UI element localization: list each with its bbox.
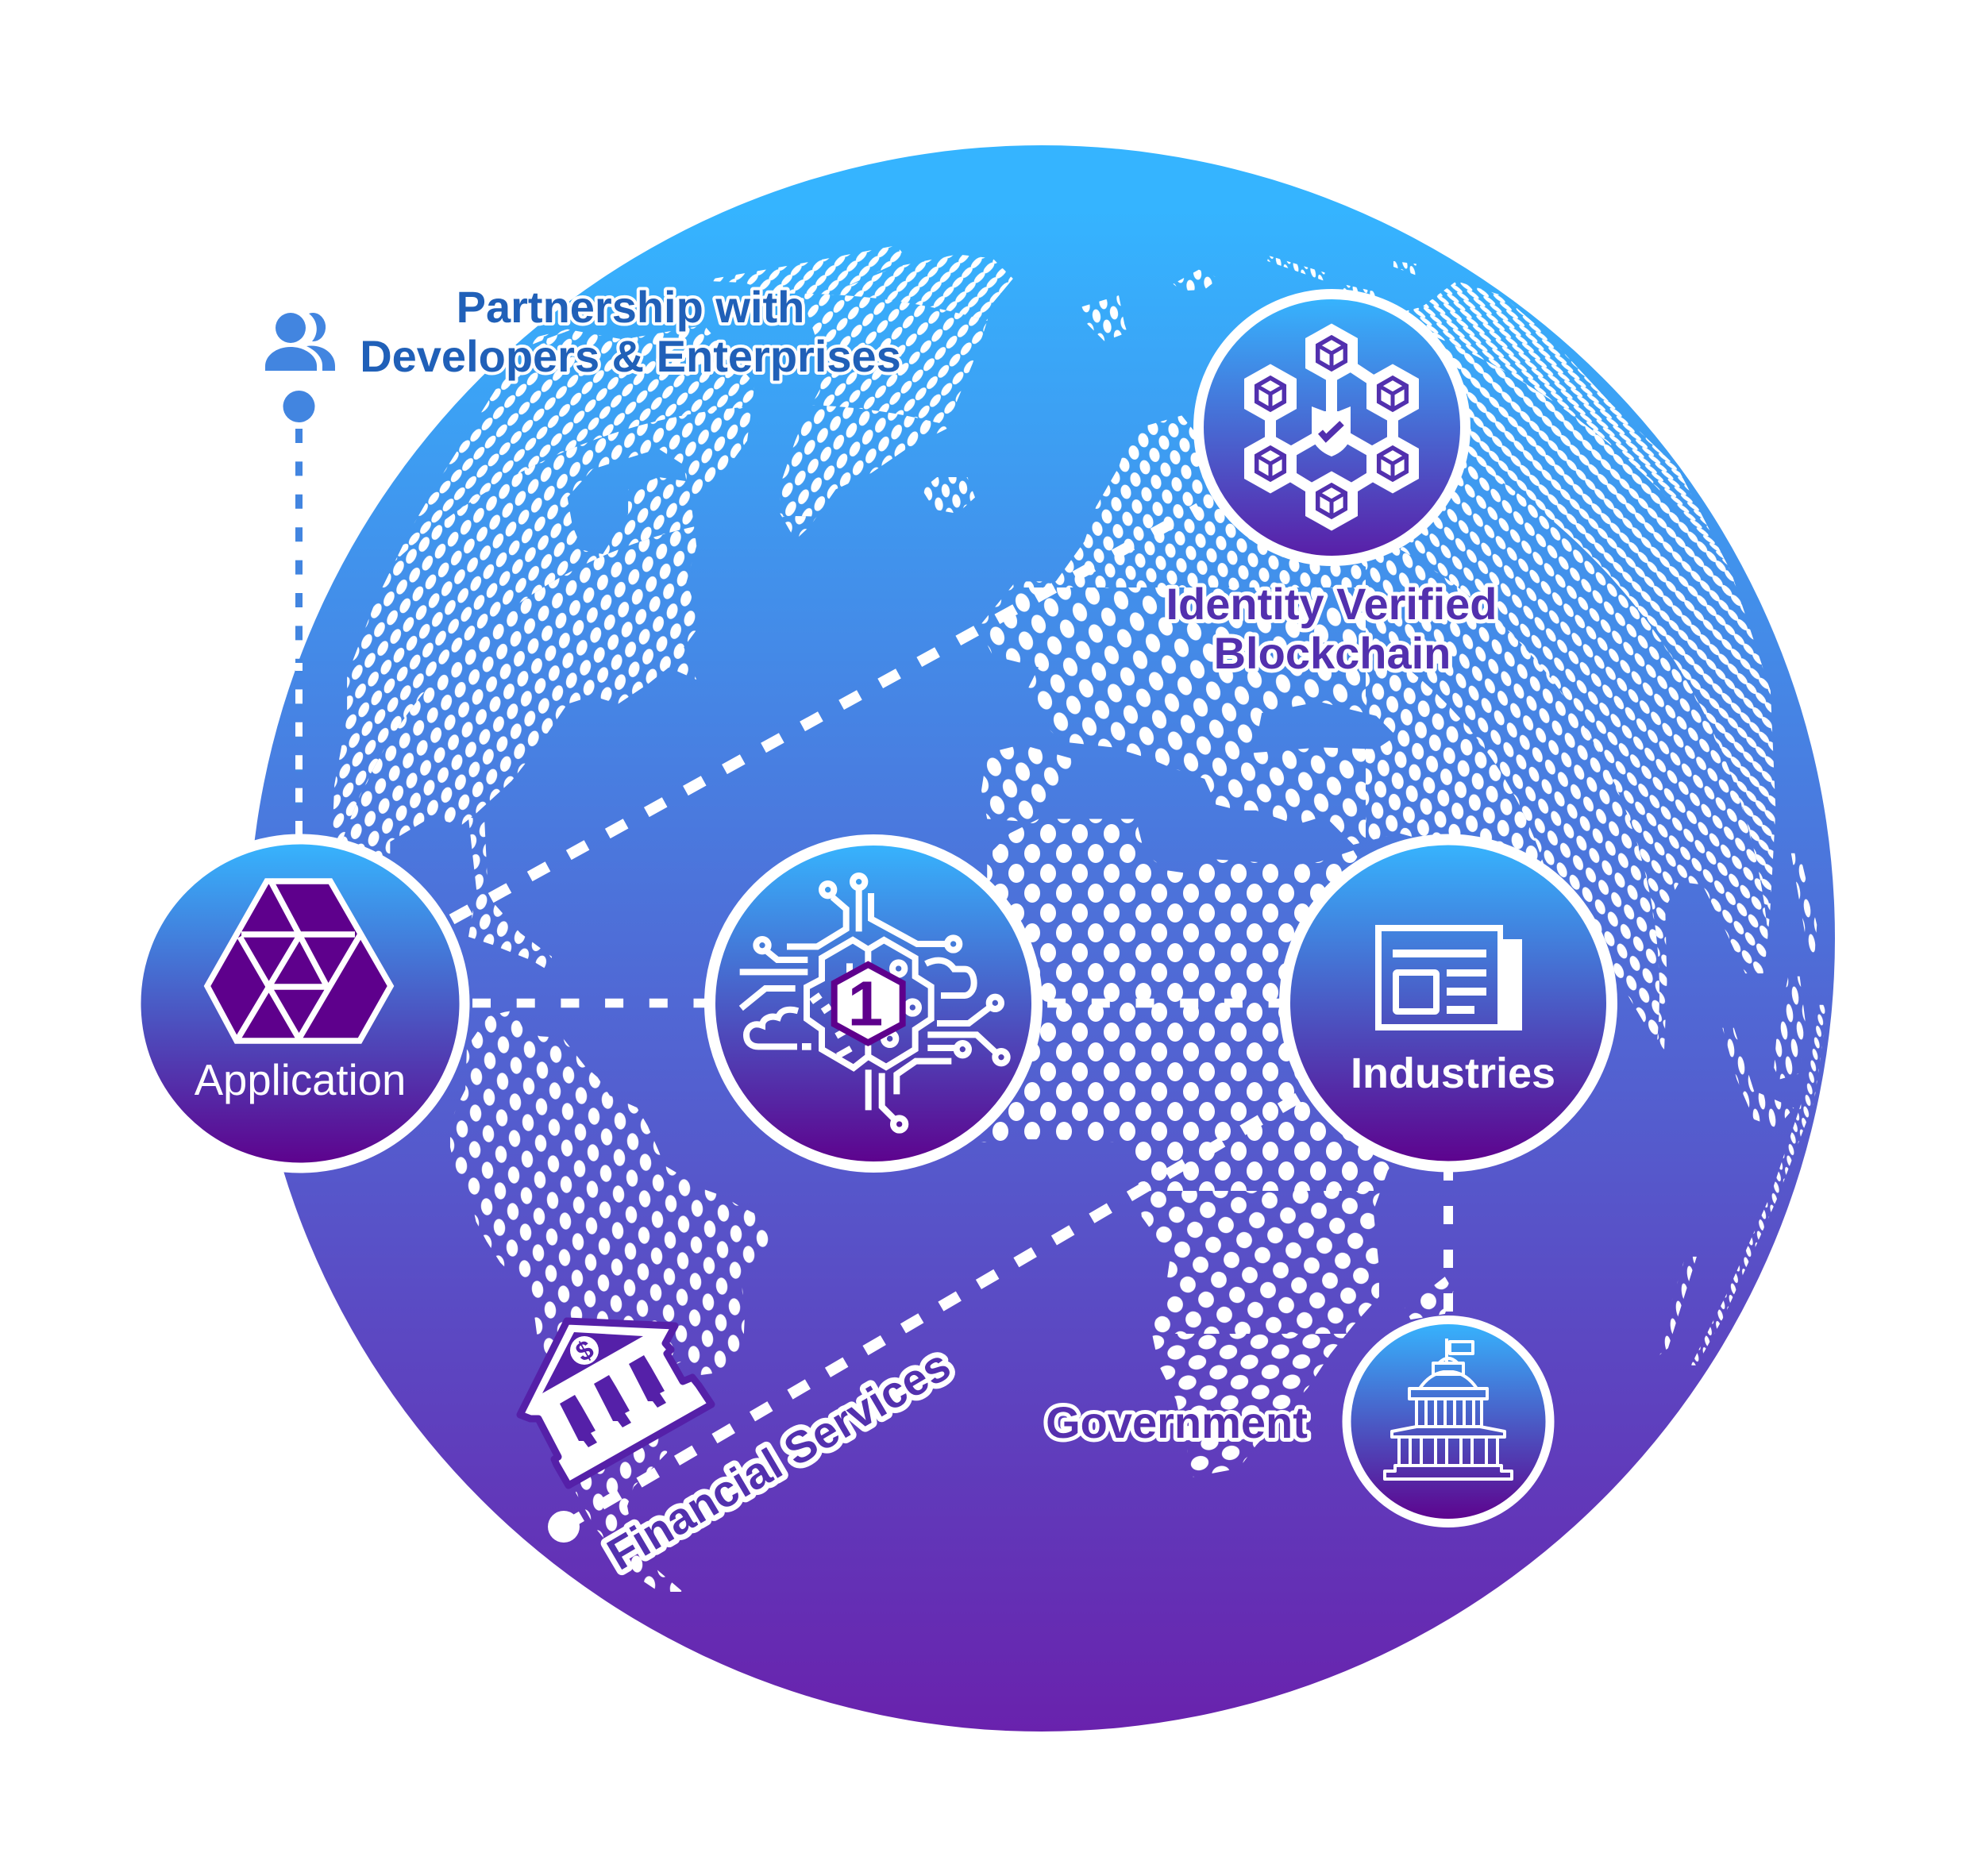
land: Europe and Asia: [981, 283, 1775, 1050]
icon: Application hexagon: [207, 880, 391, 1041]
marker dot: Financial Services: [548, 1511, 580, 1543]
marker dot: Partnership: [283, 391, 314, 422]
label: Industries: Industries: [1351, 1050, 1555, 1097]
land: North America and Greenland: [333, 246, 1013, 969]
icon: blockchain network: [1244, 324, 1419, 530]
label: Financial Services: Financial Services: [599, 1339, 958, 1579]
heading: Identity Verified Blockchain: [1166, 579, 1497, 678]
heading: Identity Verified Blockchain: Blockchain: [1214, 628, 1451, 678]
node: Application: [136, 839, 464, 1168]
dashed connector: Application to Identity Verified Blockchain: [413, 508, 1199, 941]
heading: Partnership with Developers and Enterprises: Partnership with: [457, 282, 804, 332]
heading: Partnership with Developers and Enterprises: [360, 282, 901, 381]
land: Africa and Madagascar: [981, 819, 1454, 1477]
dashed connector: Financial Services to Industries: [564, 1091, 1310, 1527]
icon: newspaper: [1375, 925, 1522, 1030]
node: Identity Verified Blockchain: [1199, 294, 1466, 560]
dotted world map: [141, 246, 1826, 1592]
land: eastern island chains: [1659, 853, 1817, 1355]
globe: [254, 145, 1835, 1732]
icon: people: [265, 313, 335, 371]
icon: circuit hexagon with number 1: [740, 876, 1008, 1131]
node: central chip: [710, 840, 1037, 1167]
heading: Partnership with Developers and Enterprises: Developers & Enterprises: [360, 331, 901, 381]
icon: bank: [520, 1321, 711, 1485]
dashed connector: Industries to Government: [1443, 1162, 1453, 1322]
icon: circuit hexagon with number 1: 1: [848, 969, 883, 1039]
label: Application: Application: [195, 1056, 406, 1104]
dashed connector: Application to Industries: [472, 999, 1290, 1007]
dashed connector: Partnership to Application (outside globe): [295, 429, 303, 842]
icon: capitol building: [1385, 1339, 1512, 1479]
node: Government: [1347, 1319, 1550, 1523]
label: Government: Government: [1046, 1397, 1308, 1447]
icon: bank: $: [571, 1335, 599, 1368]
node: Industries: [1285, 840, 1612, 1167]
dashed connector: Partnership to Application (inside globe): [295, 663, 303, 842]
land: limb strips: [1267, 256, 1826, 1366]
land: South America: [449, 1011, 769, 1592]
land: small northern islands: [924, 270, 1215, 513]
heading: Identity Verified Blockchain: Identity Verified: [1166, 579, 1497, 629]
